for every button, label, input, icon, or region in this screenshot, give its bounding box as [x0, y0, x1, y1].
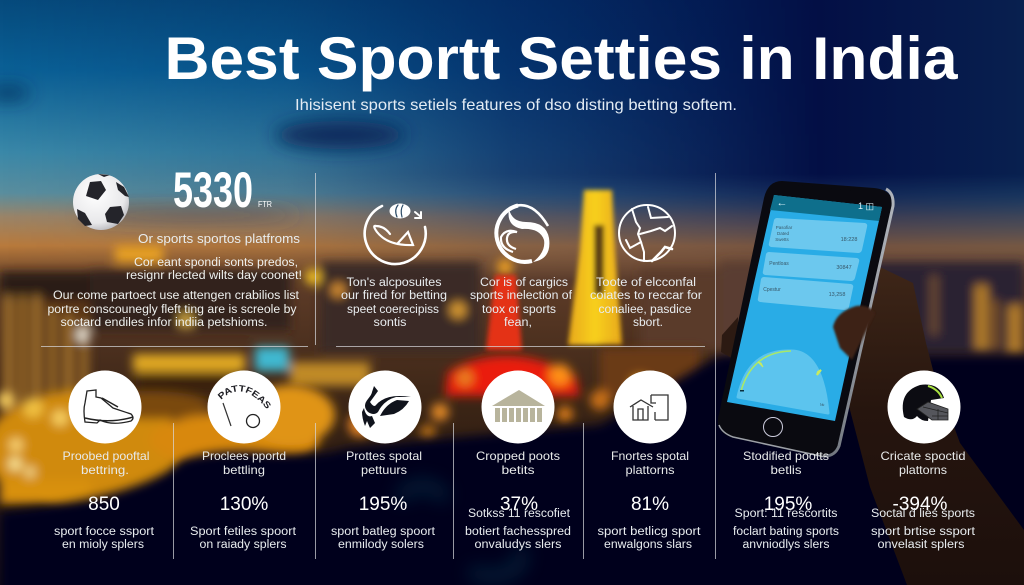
column description: on raiady splers	[200, 539, 287, 551]
feature text: speet coerecipiss	[347, 304, 439, 316]
phone mockup	[718, 181, 893, 457]
home button	[764, 418, 782, 436]
column description: Sport fetiles spoort	[190, 526, 297, 538]
column value: 195%	[359, 494, 407, 515]
app card 3	[758, 277, 853, 310]
header menu icon: 1 ◫	[858, 201, 874, 211]
column description: botiert fachesspred	[465, 526, 571, 538]
icon: phoenix	[348, 370, 422, 444]
phone screen	[727, 195, 882, 421]
panel: stat column 6	[733, 449, 839, 551]
icon: rune arc and ball	[208, 370, 280, 444]
column value: 850	[88, 494, 120, 515]
column description: onvaludys slers	[474, 539, 562, 551]
icon: globe	[619, 205, 675, 261]
app card 1	[769, 218, 867, 253]
panel: intro stat	[48, 162, 302, 329]
column label: betlis	[770, 463, 802, 477]
panel: feature 2	[470, 205, 573, 329]
icon: soccer ball	[73, 174, 129, 230]
column value: 37%	[500, 494, 538, 515]
column label: bettling	[223, 463, 265, 477]
feature text: sports inelection of	[470, 290, 573, 302]
panel: feature 1	[341, 204, 447, 329]
icon: ball and rim	[365, 204, 426, 264]
hand behind phone	[721, 267, 1024, 585]
stat caption: Or sports sportos platfroms	[138, 232, 300, 246]
feature text: Ton's alcposuites	[346, 277, 442, 289]
panel: feature 3	[590, 205, 702, 329]
subtitle: Ihisisent sports setiels features of dso disting betting softem.	[295, 97, 737, 114]
column label	[476, 449, 560, 477]
column label: Cropped poots	[476, 449, 560, 463]
column description: anvniodlys slers	[742, 539, 830, 551]
app card 3: 13,258	[829, 292, 845, 298]
phone notch	[798, 185, 855, 200]
column label	[346, 449, 422, 477]
column description: enwalgons slars	[604, 539, 692, 551]
app card 2: Pentloas	[769, 261, 789, 267]
panel: stat column 7	[871, 370, 976, 551]
header back arrow: ←	[776, 197, 788, 209]
column label	[880, 449, 966, 477]
app header	[770, 195, 882, 221]
column description: en mioly splers	[62, 539, 144, 551]
title: Best Sportt Setties in India	[164, 25, 958, 92]
app card 1: Dated	[777, 231, 789, 236]
app card 2	[763, 252, 859, 281]
column label	[202, 449, 286, 477]
feature text: sontis	[374, 317, 407, 329]
column label: Prottes spotal	[346, 449, 422, 463]
column value: 195%	[764, 494, 812, 515]
feature text	[341, 277, 447, 329]
big stat number: 5330	[173, 162, 253, 218]
column description: Sport: 11 rescortits	[734, 508, 838, 520]
column description: foclart bating sports	[733, 526, 839, 538]
app card 3: Cpestur	[763, 287, 781, 293]
panel: stat column 4	[465, 370, 571, 551]
column description: sport batleg spoort	[331, 526, 436, 538]
column label: bettring.	[81, 463, 129, 477]
column description: enmilody solers	[338, 539, 424, 551]
gauge chart	[738, 351, 828, 413]
panel: stat column 2	[190, 370, 297, 551]
intro text block	[48, 257, 302, 329]
column description	[331, 526, 436, 551]
feature text: Toote of elcconfal	[596, 277, 696, 289]
panel: stat column 3	[331, 370, 436, 551]
column description: Sotkss 11 rescofiet	[468, 508, 571, 520]
column label: Cricate spoctid	[880, 449, 966, 463]
feature text	[470, 277, 573, 329]
divider lines	[41, 173, 716, 559]
icon: rune arc and ball: PATTFEAS	[218, 385, 271, 408]
icon: house and building	[614, 370, 686, 444]
column description	[598, 526, 701, 551]
column description	[465, 508, 571, 551]
feature text: toox or sports	[482, 304, 556, 316]
column description: sport focce ssport	[54, 526, 155, 538]
feature text: our fired for betting	[341, 290, 447, 302]
app card 1: Swetts	[775, 237, 789, 242]
column label: Proobed pooftal	[62, 449, 150, 463]
column value: 81%	[631, 494, 669, 515]
intro text block: soctard endiles infor indiia petshioms.	[60, 317, 268, 329]
column description: onvelasit splers	[878, 539, 965, 551]
feature text: Cor is of cargics	[480, 277, 568, 289]
intro text block: Cor eant spondi sonts predos,	[134, 257, 298, 269]
column description	[733, 508, 839, 551]
column description: sport betlicg sport	[598, 526, 701, 538]
feature text: sbort.	[633, 317, 663, 329]
column value: 130%	[220, 494, 268, 515]
intro text block: portre conscounegly fleft ting are is screole by	[48, 304, 297, 316]
column label: Stodified pootts	[743, 449, 829, 463]
column label: Fnortes spotal	[611, 449, 689, 463]
column description: sport brtise ssport	[871, 526, 976, 538]
column label: Proclees pportd	[202, 449, 286, 463]
feature text	[590, 277, 702, 329]
column value: -394%	[893, 494, 948, 515]
phone body	[718, 181, 893, 456]
column label: pettuurs	[361, 463, 407, 477]
column description: Soctal d lies sports	[871, 508, 975, 520]
column label: plattorns	[626, 463, 674, 477]
intro text block: Our come partoect use attengen crabilios list	[53, 290, 300, 302]
column label	[62, 449, 150, 477]
panel: stat column 1	[54, 370, 155, 551]
icon: columned building	[482, 370, 554, 444]
column description	[871, 508, 976, 551]
gauge chart: №	[820, 402, 824, 407]
feature text: fean,	[504, 317, 532, 329]
intro text block: resignr rlected wilts day coonet!	[126, 270, 302, 282]
app card 1: 18:228	[841, 237, 857, 243]
column label	[611, 449, 689, 477]
stat unit: FTR	[258, 200, 272, 209]
icon: swirl	[496, 205, 549, 262]
app card 1: Pasofiar	[776, 225, 793, 230]
app card 2: 30847	[836, 265, 852, 271]
column description	[54, 526, 155, 551]
feature text: conaliee, pasdice	[598, 304, 692, 316]
thumb	[833, 306, 875, 360]
column description	[190, 526, 297, 551]
column label	[743, 449, 829, 477]
icon: football helmet	[888, 370, 960, 444]
feature text: coiates to reccar for	[590, 290, 702, 302]
column label: plattorns	[899, 463, 947, 477]
icon: boot	[68, 370, 142, 444]
column label: betits	[502, 463, 534, 477]
panel: stat column 5	[598, 370, 701, 551]
